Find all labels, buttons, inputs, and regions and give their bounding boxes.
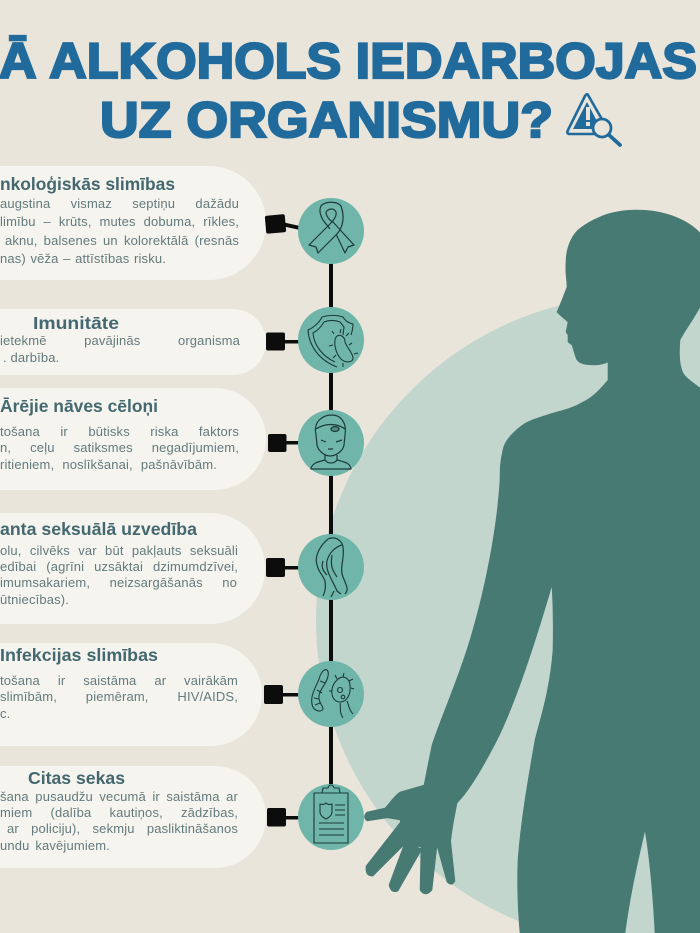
heading: anta seksuālā uzvedība [0,519,197,539]
icon: clipboard document [298,784,364,850]
text block: aknu, balsenes un kolorektālā (resnās [5,233,239,248]
title [0,33,697,148]
heading: Infekcijas slimības [0,645,158,665]
panel: immunity [0,309,266,375]
connector 5 [264,685,299,704]
text block: slimībām, piemēram, HIV/AIDS, [0,689,238,704]
text block [0,196,239,266]
text block: imumsakariem, neizsargāšanās no [0,575,237,590]
text block [0,543,238,607]
icon: germs [298,661,364,727]
text block: augstina vismaz septiņu dažādu [0,196,239,211]
connector 3 [268,434,301,452]
connector 4 [266,558,300,577]
text block: . darbība. [3,350,59,365]
text block: c. [0,706,10,721]
text block: limību – krūts, mutes dobuma, rīkles, [0,214,239,229]
panel: risky sexual behaviour [0,513,265,624]
icon: warning triangle with magnifier [567,94,620,145]
panel: infectious diseases [0,643,262,746]
text block: tošana ir saistāma ar vairākām [0,673,238,688]
panel: external causes of death [0,388,266,490]
text block: ritieniem, noslīkšanai, pašnāvībām. [0,457,217,472]
icon: injured person [298,410,364,476]
text block: miem (dalība kautiņos, zādzības, [0,805,238,820]
icon: cancer ribbon [298,198,364,264]
icon: woman with long hair [298,534,364,600]
text block: edībai (agrīni uzsāktai dzimumdzīvei, [0,559,238,574]
text block [0,333,240,365]
connector 2 [266,332,300,350]
text block: olu, cilvēks var būt pakļauts seksuāli [0,543,238,558]
panel: oncological diseases [0,166,266,280]
text block: n, ceļu satiksmes negadījumiem, [0,440,239,455]
text block: undu kavējumiem. [0,838,110,853]
icon: shield with bacterium [298,307,364,373]
text block: ūtniecības). [0,592,69,607]
panel: other consequences [0,766,266,868]
text block: šana pusaudžu vecumā ir saistāma ar [0,789,238,804]
text block: ietekmē pavājinās organisma [0,333,240,348]
text block: nas) vēža – attīstības risku. [0,251,166,266]
text block [0,789,238,853]
connector 1 [265,214,300,234]
title line 2: UZ ORGANISMU? [100,92,553,148]
human silhouette [364,210,700,933]
title line 1: Ā ALKOHOLS IEDARBOJAS [0,33,697,89]
heading: Ārējie nāves cēloņi [0,396,158,416]
text block [0,424,239,472]
background pale circle [316,295,700,933]
text block: ar policiju), sekmju pasliktināšanos [7,821,238,836]
heading: Imunitāte [33,313,119,333]
heading: nkoloģiskās slimības [0,174,175,194]
heading: Citas sekas [28,768,125,788]
connector 6 [267,808,300,826]
text block: tošana ir būtisks riska faktors [0,424,239,439]
text block [0,673,238,721]
